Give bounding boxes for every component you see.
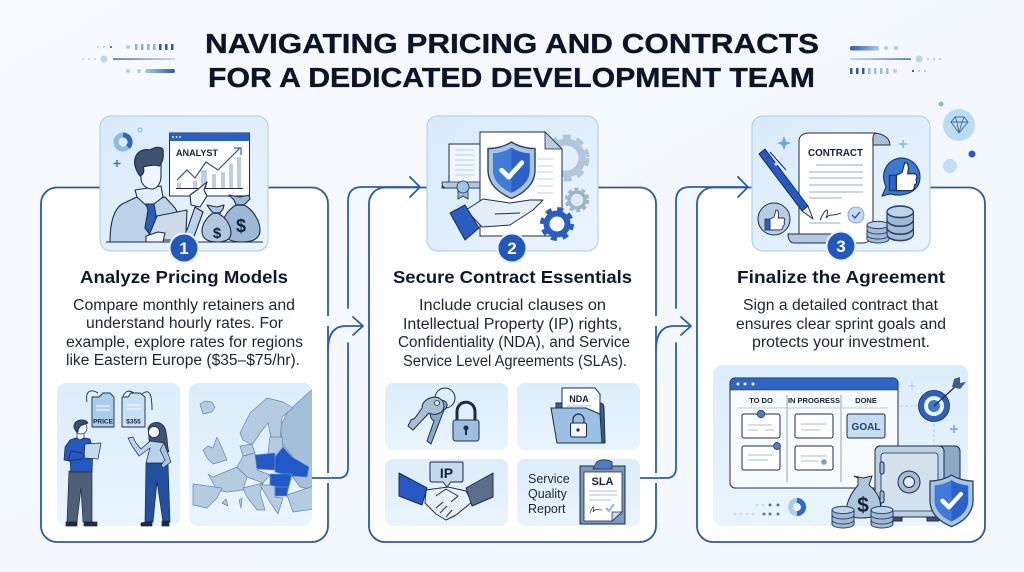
text block: step 1 description: Compare monthly retainers and <box>73 297 295 314</box>
panel: IP handshake: IP <box>440 465 453 481</box>
decoration: header right <box>850 46 941 74</box>
sprint board window: TO DO <box>749 396 773 405</box>
figure: man with tablet <box>64 420 101 526</box>
text block: step 2 description: Include crucial clauses on <box>419 297 606 314</box>
money bags <box>202 195 260 242</box>
hand and cuff <box>450 199 543 240</box>
text block: step 1 description: like Eastern Europe ($35–$75/hr). <box>66 352 300 369</box>
badge: step 2: 2 <box>507 239 517 258</box>
text block: step 1 description: understand hourly rates. For <box>86 315 283 332</box>
heading: step 2: Secure Contract Essentials <box>393 267 632 287</box>
contract scroll <box>788 133 890 243</box>
badge: step 2 <box>496 232 528 264</box>
main document <box>480 132 562 236</box>
icon: contract with shield and hand <box>427 116 598 251</box>
icon: analyst with chart and money bags: $ <box>236 216 246 236</box>
icon: price tags: $355 <box>126 418 141 426</box>
panel: IP handshake <box>385 459 508 526</box>
icon: analyst with chart and money bags <box>100 116 268 251</box>
chart window: ANALYST <box>176 148 218 158</box>
thumbs up bubble right <box>882 158 920 196</box>
text block: step 2 description: Confidentiality (NDA), and Service <box>398 334 630 351</box>
safe <box>875 446 960 521</box>
text block: step 3 description: ensures clear sprint goals and <box>736 316 946 333</box>
panel: step 3 card <box>697 188 985 542</box>
contract scroll: CONTRACT <box>808 148 863 159</box>
panel: price discussion <box>57 383 180 526</box>
title: NAVIGATING PRICING AND CONTRACTS <box>205 28 819 59</box>
panel: sprint board, safe and goal <box>713 365 973 528</box>
text block: step 3 description: protects your investment. <box>752 334 930 351</box>
analyst figure <box>110 147 207 242</box>
heading: step 1: Analyze Pricing Models <box>80 267 288 287</box>
icon: analyst with chart and money bags: $ <box>213 225 222 242</box>
text block: step 1 description <box>66 297 303 369</box>
badge: step 3: 3 <box>836 237 846 256</box>
sprint board window <box>730 378 898 488</box>
text block: step 2 description: Intellectual Property (IP) rights, <box>403 316 622 333</box>
target with arrow <box>918 377 966 422</box>
shield <box>930 475 973 527</box>
decoration: dots and donut <box>734 500 804 516</box>
highlighted Eastern Europe <box>255 447 309 496</box>
pen <box>759 149 813 219</box>
sprint board window: DONE <box>855 396 877 405</box>
panel: SLA report: Service <box>528 472 570 486</box>
coin stacks <box>867 221 889 243</box>
back certificate <box>442 144 481 199</box>
arrow: connector from step 1 to step 2 <box>312 177 420 483</box>
panel: SLA report: SLA <box>592 476 614 488</box>
panel: NDA folder: NDA <box>569 394 589 404</box>
panel: step 2 card <box>369 188 656 542</box>
panel: step 1 card <box>41 188 328 542</box>
title <box>205 28 819 93</box>
badge: step 3 <box>826 230 856 262</box>
blue gear <box>546 214 568 234</box>
chart window <box>170 133 250 196</box>
sprint board window: GOAL <box>852 422 880 433</box>
heading: step 3: Finalize the Agreement <box>737 267 945 287</box>
arrow: connector from step 2 to step 3 <box>640 177 748 483</box>
panel: Europe map <box>189 383 314 526</box>
panel: SLA report <box>517 459 640 526</box>
panel: keys and lock <box>385 383 508 450</box>
panel: NDA folder <box>517 383 640 450</box>
title: FOR A DEDICATED DEVELOPMENT TEAM <box>208 62 815 93</box>
text block: step 3 description: Sign a detailed contract that <box>743 297 939 314</box>
gears <box>550 142 582 174</box>
panel: SLA report: Report <box>528 502 566 516</box>
figure: woman gesturing <box>128 422 171 526</box>
icon: contract signing with coins <box>752 116 930 251</box>
thumbs up left <box>758 203 790 235</box>
decoration: header left <box>82 44 175 73</box>
money bag and coins: $ <box>857 494 869 517</box>
money bag and coins <box>832 476 893 528</box>
badge: step 1 <box>168 232 200 264</box>
badge: step 1: 1 <box>179 239 189 258</box>
shield check <box>488 142 535 198</box>
decoration: diamond and bubbles <box>938 102 976 173</box>
text block: step 1 description: example, explore rates for regions <box>66 334 303 351</box>
icon: price tags: PRICE <box>93 418 114 426</box>
text block: step 2 description: Service Level Agreements (SLAs). <box>403 353 627 370</box>
text block: step 3 description <box>736 297 946 351</box>
icon: price tags <box>87 391 152 427</box>
panel: SLA report: Quality <box>528 487 568 501</box>
text block: step 2 description <box>398 297 630 370</box>
sprint board window: IN PROGRESS <box>788 396 840 405</box>
